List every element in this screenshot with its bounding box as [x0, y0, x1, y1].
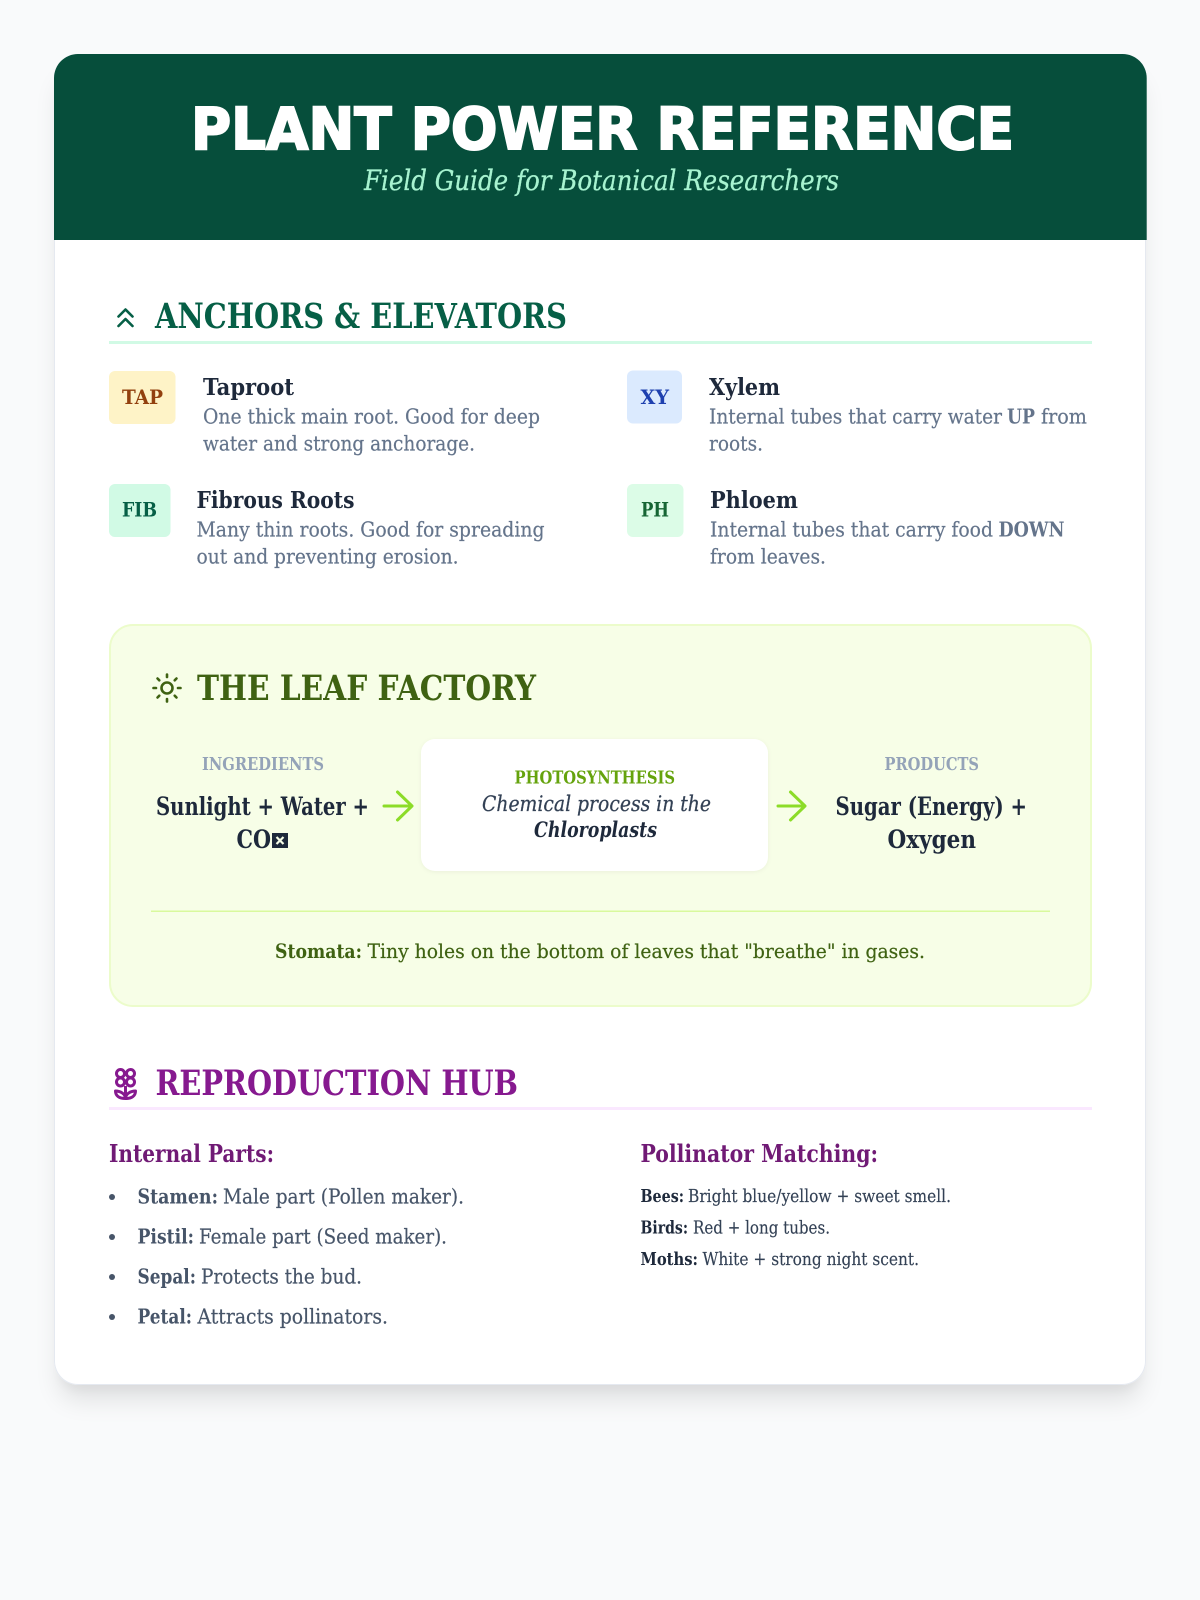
products column: PRODUCTS: [884, 755, 979, 775]
subtitle: Field Guide for Botanical Researchers: [363, 164, 839, 197]
arrow: process to products: [778, 792, 805, 820]
icon: sun: [154, 674, 180, 702]
ingredients column: [156, 755, 369, 854]
section: anchors and elevators: [109, 296, 1092, 568]
process box: photosynthesis: PHOTOSYNTHESIS: [514, 768, 675, 788]
phloem description: [710, 518, 1064, 568]
subheading: pollinator matching: Pollinator Matching:: [640, 1139, 878, 1168]
phloem name: Phloem: [710, 487, 798, 514]
list: parts: Male part (Pollen maker).: [223, 1184, 464, 1208]
list: parts: Protects the bud.: [201, 1264, 362, 1288]
ingredients column: CO: [236, 825, 271, 854]
ingredients column: Sunlight + Water +: [156, 792, 369, 821]
heading: reproduction hub: REPRODUCTION HUB: [156, 1063, 518, 1104]
panel: the leaf factory: [110, 625, 1091, 1006]
process box: photosynthesis: Chloroplasts: [534, 817, 657, 842]
badge: TAP: [109, 371, 176, 424]
column: internal parts: [109, 1139, 464, 1328]
taproot description: [203, 404, 540, 456]
item: fibrous roots: [109, 484, 544, 568]
ingredients column: INGREDIENTS: [202, 755, 324, 775]
xylem description: [709, 404, 1087, 456]
list: pollinators: Birds:: [640, 1218, 688, 1238]
item: xylem: [627, 370, 1087, 456]
list: parts: Stamen:: [138, 1184, 218, 1208]
list: pollinators: White + strong night scent.: [702, 1249, 919, 1270]
process box: photosynthesis: [421, 739, 768, 871]
badge: PH: [627, 484, 684, 537]
stomata note: Tiny holes on the bottom of leaves that "breathe" in gases.: [368, 939, 925, 963]
heading: anchors and elevators: ANCHORS & ELEVATORS: [154, 296, 567, 337]
taproot description: One thick main root. Good for deep: [203, 404, 540, 428]
badge: TAP: TAP: [122, 385, 163, 409]
list: pollinators: Bright blue/yellow + sweet smell.: [688, 1186, 951, 1207]
section: reproduction hub: [109, 1063, 1092, 1328]
list: parts: [109, 1184, 464, 1328]
list: parts: Attracts pollinators.: [197, 1304, 388, 1328]
xylem description: UP: [1007, 404, 1035, 428]
arrow: ingredients to process: [384, 792, 412, 820]
fibrous roots description: [196, 518, 544, 568]
fibrous roots name: Fibrous Roots: [196, 487, 354, 514]
xylem description: from: [1041, 404, 1087, 428]
fibrous roots description: out and preventing erosion.: [196, 544, 458, 568]
phloem description: DOWN: [998, 518, 1064, 542]
list: parts: Sepal:: [138, 1264, 196, 1288]
list: pollinators: Moths:: [640, 1249, 698, 1270]
badge: XY: XY: [640, 385, 670, 409]
list: parts: Petal:: [138, 1304, 192, 1328]
xylem name: Xylem: [709, 374, 780, 401]
process box: photosynthesis: Chemical process in the: [482, 792, 711, 816]
column: pollinator matching: [640, 1139, 951, 1270]
stomata note: Stomata:: [275, 939, 362, 963]
badge: FIB: FIB: [122, 498, 157, 522]
taproot name: Taproot: [203, 374, 294, 401]
list: pollinators: [640, 1186, 951, 1270]
badge: PH: PH: [641, 498, 669, 522]
phloem description: Internal tubes that carry food: [710, 518, 993, 542]
icon: flower: [116, 1070, 136, 1099]
badge: FIB: [109, 484, 170, 537]
products column: Sugar (Energy) +: [836, 792, 1027, 821]
taproot description: water and strong anchorage.: [203, 432, 475, 456]
badge: XY: [627, 370, 682, 424]
phloem description: from leaves.: [710, 544, 826, 568]
subheading: internal parts: Internal Parts:: [109, 1139, 274, 1168]
list: pollinators: Bees:: [640, 1186, 684, 1207]
xylem description: roots.: [709, 432, 763, 456]
xylem description: Internal tubes that carry water: [709, 404, 1002, 428]
item: taproot: [109, 371, 540, 456]
fibrous roots description: Many thin roots. Good for spreading: [196, 518, 544, 542]
header band: [54, 54, 1147, 240]
icon: double chevron up: [118, 310, 132, 326]
title: PLANT POWER REFERENCE: [191, 95, 1014, 163]
products column: Oxygen: [888, 825, 976, 854]
heading: the leaf factory: THE LEAF FACTORY: [197, 668, 537, 709]
item: phloem: [627, 484, 1064, 568]
list: pollinators: Red + long tubes.: [693, 1218, 830, 1238]
list: parts: Pistil:: [138, 1224, 194, 1248]
list: parts: Female part (Seed maker).: [199, 1224, 447, 1248]
products column: [836, 755, 1027, 854]
card background: [54, 54, 1146, 1385]
